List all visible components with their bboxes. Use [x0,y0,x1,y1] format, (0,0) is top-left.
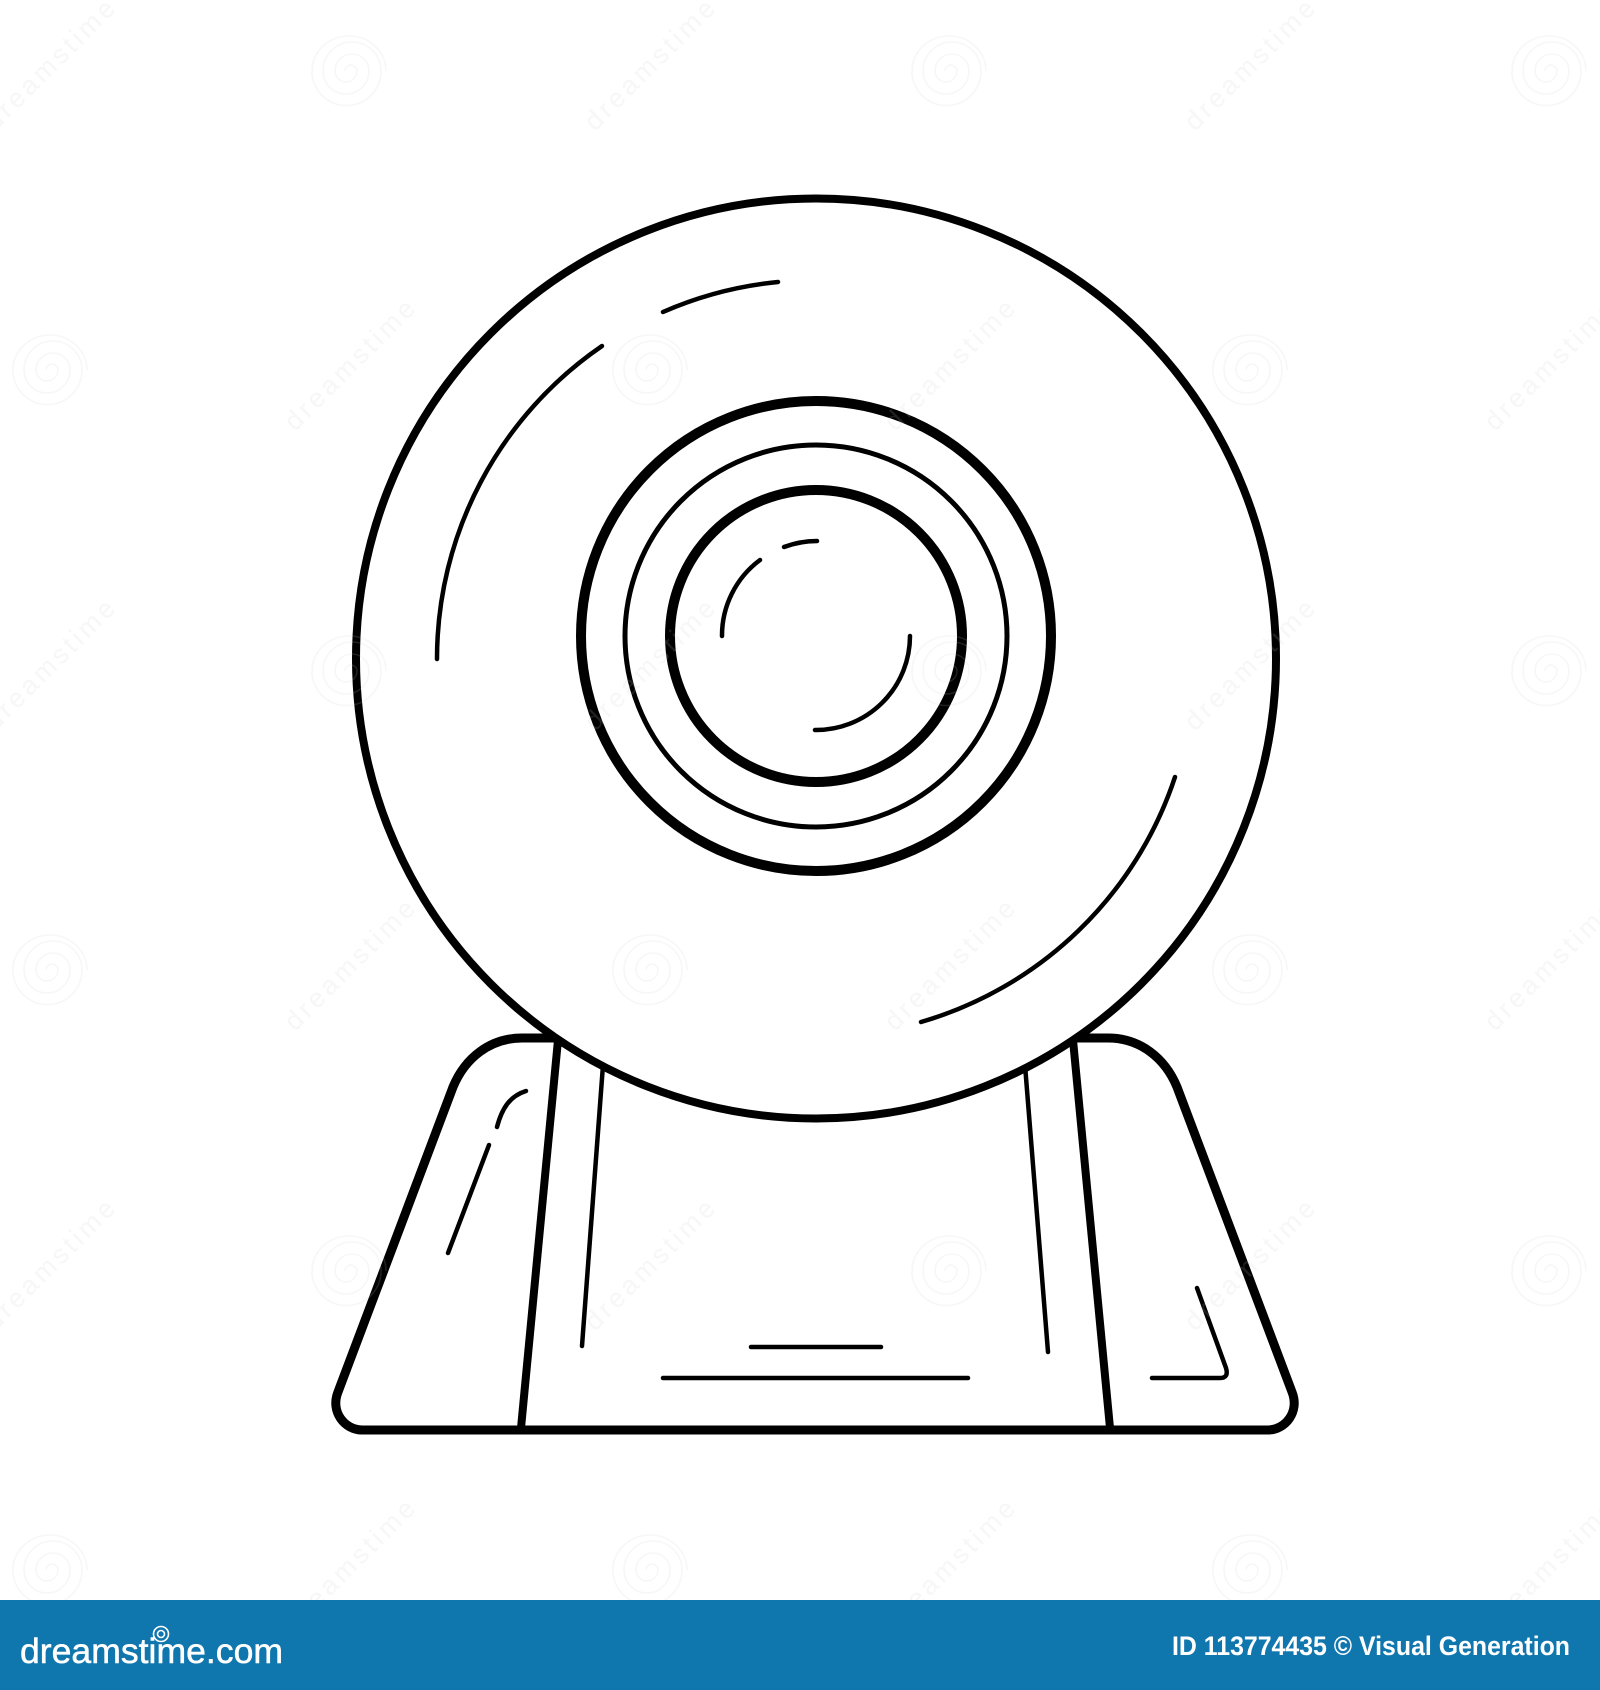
right stand divider [1073,1040,1110,1428]
lower right body highlight [921,777,1175,1022]
lens lower right highlight [815,636,910,730]
watermark text: dreamstime [278,1493,421,1636]
long base line [663,1376,968,1380]
footer bar [0,1600,1600,1690]
watermark text: dreamstime [578,1193,721,1336]
left inner line [582,1065,603,1346]
stand outline [336,1038,1294,1430]
middle lens ring [625,445,1007,827]
watermark text: dreamstime [578,593,721,736]
watermark text: dreamstime [278,293,421,436]
watermark text: dreamstime [278,893,421,1036]
footer background [0,1600,1600,1690]
inner lens ring [670,490,962,782]
outer lens ring [581,401,1051,871]
outer camera circle [356,198,1276,1118]
right inner line [1025,1065,1048,1352]
logo spiral icon [154,1626,168,1642]
watermark text: dreamstime [878,893,1021,1036]
left curved highlight [497,1091,526,1127]
short base line [751,1345,881,1349]
left body highlight [437,346,602,659]
camera head [356,198,1276,1118]
right corner highlight [1152,1288,1227,1378]
top body highlight [663,282,778,312]
watermark text: dreamstime [878,1493,1021,1636]
image id and credit: ID 113774435 © Visual Generation [1172,1631,1570,1661]
left straight highlight [448,1145,489,1253]
lens top highlight [784,541,817,547]
webcam stand [336,1038,1294,1430]
left stand divider [521,1040,558,1428]
watermark text: dreamstime [1178,593,1321,736]
dreamstime logo text: dreamstime.com [20,1632,283,1671]
lens left highlight [722,560,760,636]
watermark text: dreamstime [1178,1193,1321,1336]
watermark text: dreamstime [878,293,1021,436]
